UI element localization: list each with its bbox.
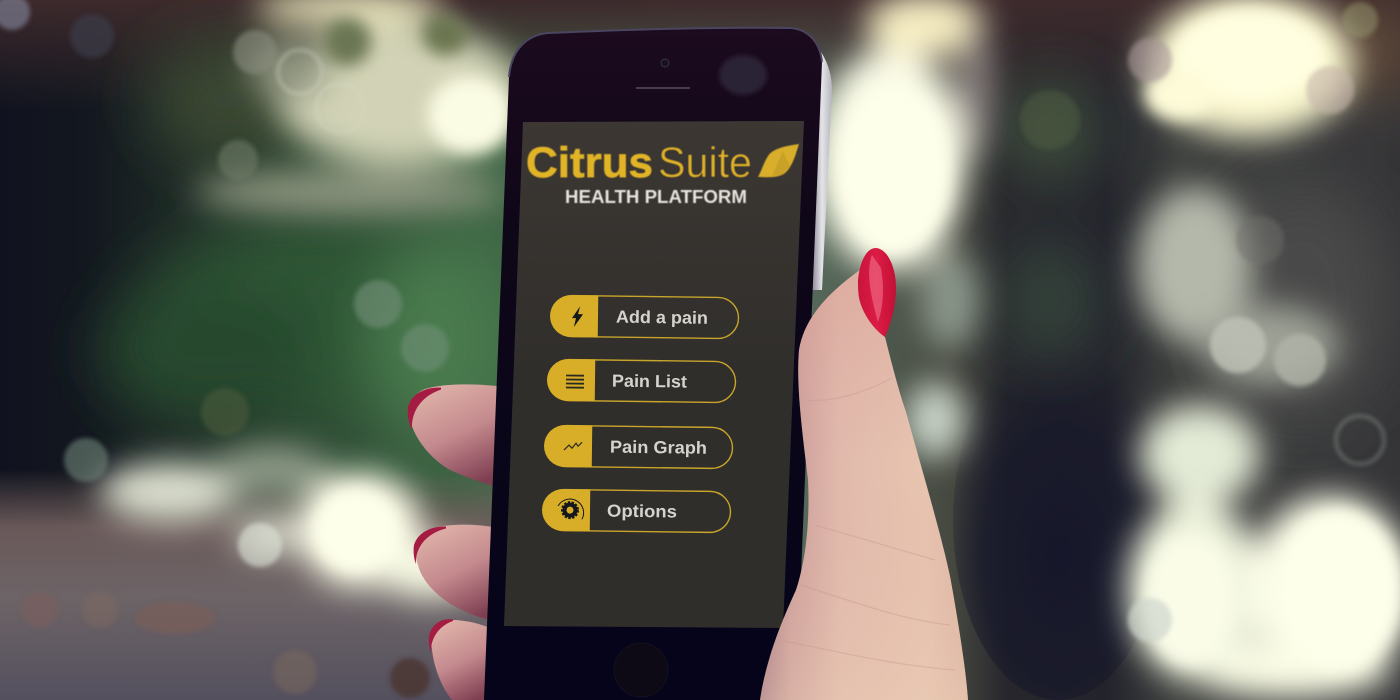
screen xyxy=(504,121,804,628)
finger: middle xyxy=(414,525,493,621)
menu button: Pain Graph xyxy=(544,425,733,469)
phone rim highlight xyxy=(509,28,822,77)
phone xyxy=(484,28,832,700)
menu button: Options xyxy=(542,489,731,533)
camera xyxy=(661,59,669,67)
thumb creases xyxy=(780,378,955,670)
thumb nail xyxy=(858,248,896,337)
logo word: Citrus: Citrus xyxy=(526,139,653,187)
icon: line graph xyxy=(564,442,582,450)
back fingers xyxy=(408,384,497,700)
finger: lower xyxy=(429,619,495,700)
reflection on bezel xyxy=(719,55,767,95)
icon: citrus leaf xyxy=(758,144,799,177)
icon: list xyxy=(566,375,584,389)
menu button: Add a pain xyxy=(550,295,739,339)
phone body xyxy=(484,28,822,700)
icon: lightning bolt xyxy=(572,306,583,327)
menu button: Pain List xyxy=(547,359,736,403)
menu button: Add a pain: Add a pain xyxy=(616,307,708,328)
finger: upper xyxy=(408,384,497,487)
phone side edge xyxy=(812,52,832,290)
menu button: Options: Options xyxy=(607,501,677,521)
menu button: Pain List: Pain List xyxy=(612,371,687,392)
subtitle: HEALTH PLATFORM xyxy=(565,187,747,207)
speaker xyxy=(636,87,690,89)
thumb xyxy=(760,248,968,700)
menu button: Pain Graph: Pain Graph xyxy=(610,437,707,458)
home button xyxy=(614,643,668,697)
logo xyxy=(526,139,799,187)
logo word: Suite: Suite xyxy=(658,139,752,187)
icon: gear with arc xyxy=(558,499,584,519)
